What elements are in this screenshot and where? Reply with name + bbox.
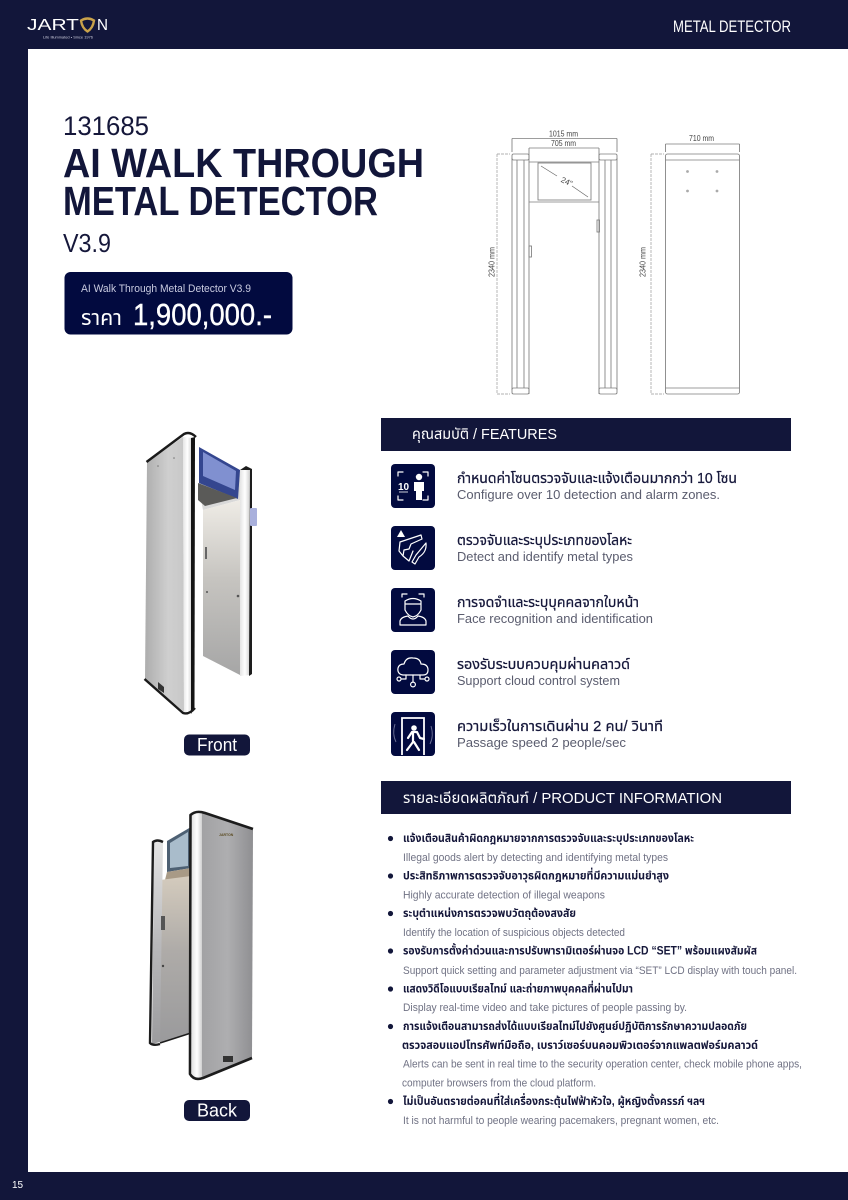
product information list: รองรับการตั้งค่าด่วนและการปรับพารามิเตอร์ผ่านจอ LCD “SET” พร้อมแผงสัมผัส	[403, 943, 757, 958]
technical drawing: front elevation	[488, 130, 617, 394]
page number: 15	[12, 1180, 24, 1191]
technical drawing: front elevation: 2340 mm	[488, 247, 496, 277]
product information list: ระบุตำแหน่งการตรวจพบวัตถุต้องสงสัย	[403, 906, 576, 920]
product photo: back view	[150, 812, 253, 1079]
feature: cloud control: รองรับระบบควบคุมผ่านคลาวด์	[457, 656, 630, 673]
icon: zone person: 10	[398, 482, 410, 493]
product title: METAL DETECTOR	[63, 178, 378, 224]
product information list: Highly accurate detection of illegal weapons	[403, 890, 605, 902]
icon: walk through gate	[391, 712, 435, 756]
product information list: Identify the location of suspicious objects detected	[403, 927, 625, 939]
technical drawing: side elevation: 2340 mm	[638, 247, 648, 277]
product information list: แสดงวิดีโอแบบเรียลไทม์ และถ่ายภาพบุคคลที่ผ่านไปมา	[403, 980, 633, 996]
product title	[63, 140, 424, 224]
heading: features: คุณสมบัติ / FEATURES	[412, 426, 557, 443]
feature: face recognition: การจดจำและระบุบุคคลจากใบหน้า	[457, 595, 639, 611]
header category label: METAL DETECTOR	[673, 17, 791, 36]
product information list: It is not harmful to people wearing pacemakers, pregnant women, etc.	[403, 1115, 719, 1127]
feature: metal types: Detect and identify metal types	[457, 549, 633, 564]
product information list: การแจ้งเตือนสามารถส่งได้แบบเรียลไทม์ไปยังศูนย์ปฏิบัติการรักษาความปลอดภัย	[403, 1019, 747, 1034]
feature: face recognition: Face recognition and identification	[457, 611, 653, 626]
technical drawing: front elevation: 705 mm	[551, 139, 576, 148]
product information list: Display real-time video and take pictures of people passing by.	[403, 1002, 687, 1014]
icon: weapons	[391, 526, 435, 570]
feature: passage speed: Passage speed 2 people/sec	[457, 735, 626, 750]
feature: cloud control: Support cloud control system	[457, 673, 620, 688]
badge: front: Front	[197, 735, 237, 755]
badge: back	[184, 1100, 250, 1121]
technical drawing: front elevation: 1015 mm	[549, 130, 578, 138]
product information list: ประสิทธิภาพการตรวจจับอาวุธผิดกฎหมายที่มีความแม่นยำสูง	[403, 867, 669, 884]
model number: 131685	[63, 111, 149, 141]
logo: Jarton: N	[97, 17, 108, 34]
logo: Jarton	[27, 17, 108, 40]
feature: detection zones: กำหนดค่าโซนตรวจจับและแจ้งเตือนมากกว่า 10 โซน	[457, 470, 737, 487]
product information list	[388, 831, 802, 1127]
feature: passage speed	[391, 712, 663, 756]
price box: 1,900,000.-	[133, 297, 272, 332]
technical drawing: side elevation: 710 mm	[689, 134, 714, 143]
feature: detection zones: Configure over 10 detection and alarm zones.	[457, 487, 720, 502]
icon: face scan	[391, 588, 435, 632]
feature: face recognition	[391, 588, 653, 632]
product information list: computer browsers from the cloud platform.	[402, 1078, 596, 1090]
feature: cloud control	[391, 650, 630, 694]
price box	[64, 272, 292, 334]
product information list: ตรวจสอบแอปโทรศัพท์มือถือ, เบราว์เซอร์บนคอมพิวเตอร์จากแพลตฟอร์มคลาวด์	[402, 1038, 758, 1052]
version: V3.9	[63, 228, 111, 258]
heading: product information: รายละเอียดผลิตภัณฑ์ / PRODUCT INFORMATION	[403, 790, 722, 807]
icon: cloud network	[391, 650, 435, 694]
feature: metal types	[391, 526, 633, 570]
product title: AI WALK THROUGH	[63, 140, 424, 186]
logo: Jarton: Life Illuminated • Since 1976	[43, 34, 94, 40]
price box: AI Walk Through Metal Detector V3.9	[81, 283, 251, 295]
logo: Jarton: JART	[27, 17, 80, 34]
technical drawing: side elevation	[638, 134, 740, 394]
product information list: แจ้งเตือนสินค้าผิดกฎหมายจากการตรวจจับและระบุประเภทของโลหะ	[403, 831, 694, 845]
heading: features	[381, 418, 791, 451]
product photo: back view: JARTON	[219, 833, 234, 837]
product photo: front view	[144, 433, 257, 714]
icon: zone person	[391, 464, 435, 508]
product information list: Support quick setting and parameter adjustment via “SET” LCD display with touch panel.	[403, 965, 797, 977]
feature: metal types: ตรวจจับและระบุประเภทของโลหะ	[457, 533, 632, 549]
badge: front	[184, 734, 250, 756]
price box: ราคา	[81, 307, 122, 330]
heading: product information	[381, 781, 791, 814]
badge: back: Back	[197, 1100, 238, 1120]
feature: detection zones	[391, 464, 737, 508]
technical drawing: front elevation: 24"	[559, 175, 574, 188]
feature: passage speed: ความเร็วในการเดินผ่าน 2 คน/ วินาที	[457, 718, 663, 735]
product information list: ไม่เป็นอันตรายต่อคนที่ใส่เครื่องกระตุ้นไฟฟ้าหัวใจ, ผู้หญิงตั้งครรภ์ ฯลฯ	[403, 1093, 705, 1109]
product information list: Illegal goods alert by detecting and identifying metal types	[403, 852, 668, 864]
product information list: Alerts can be sent in real time to the security operation center, check mobile phone apps,	[403, 1058, 802, 1070]
